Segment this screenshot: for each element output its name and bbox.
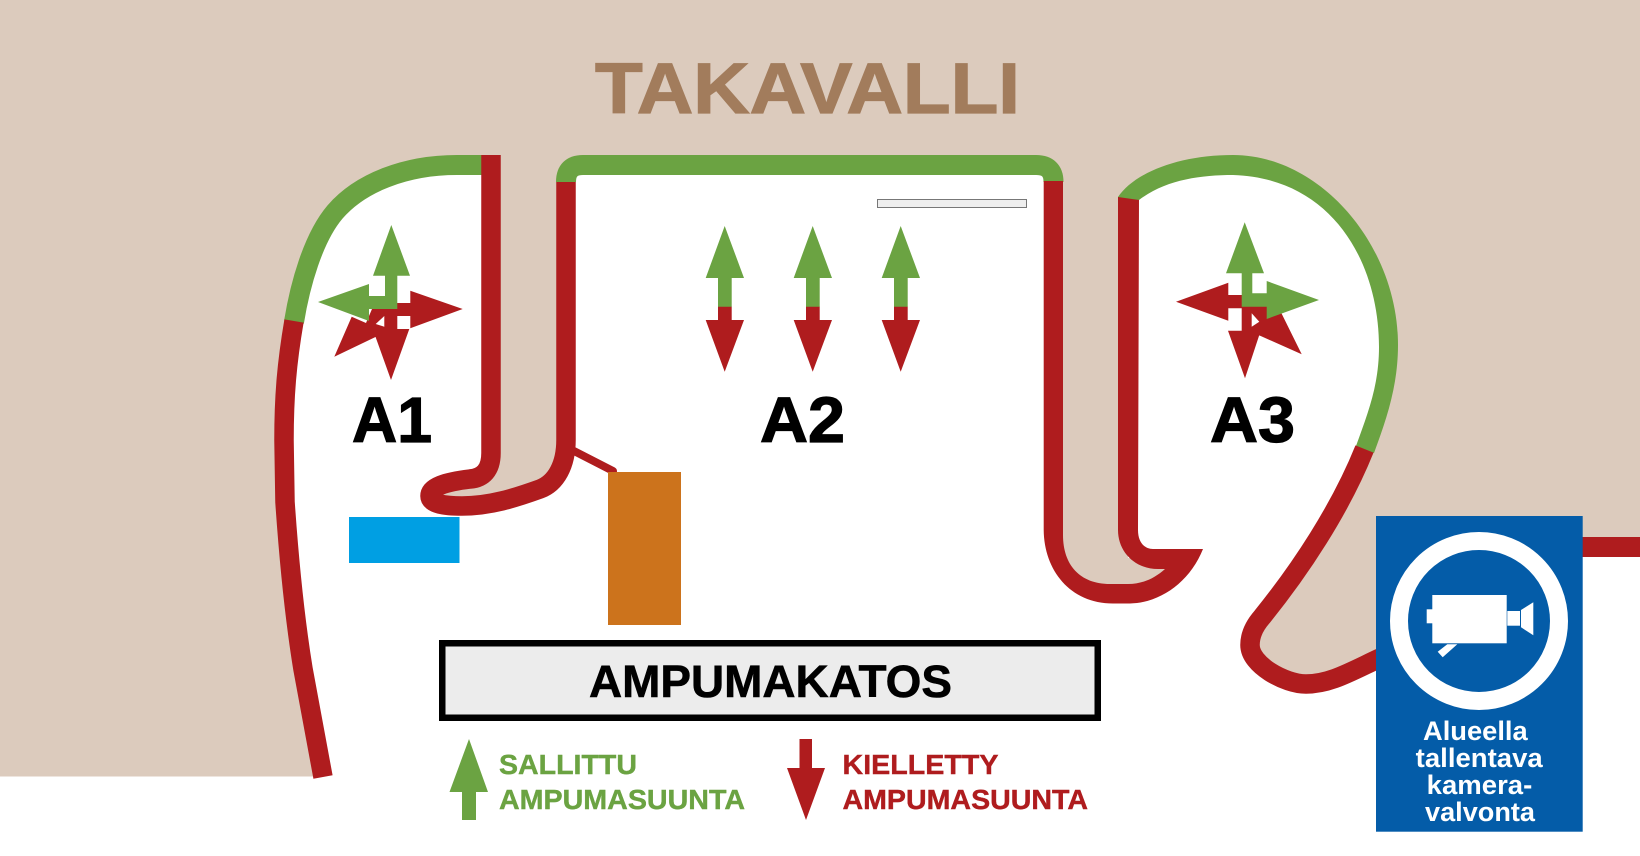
red stub line to orange block xyxy=(574,451,613,471)
legend: allowed direction xyxy=(450,739,745,820)
legend: forbidden direction: AMPUMASUUNTA xyxy=(842,784,1088,815)
red embankment right of sign xyxy=(1580,537,1640,557)
orange block xyxy=(608,472,681,625)
legend: allowed direction: AMPUMASUUNTA xyxy=(499,784,745,815)
sign: camera surveillance: tallentava xyxy=(1416,743,1544,773)
sign: camera surveillance: valvonta xyxy=(1425,797,1536,827)
arrows A3: shooting directions xyxy=(1176,222,1319,378)
berm A2: green top and red right side xyxy=(566,165,1203,604)
icon: video camera xyxy=(1427,595,1533,657)
label A2: A2 xyxy=(760,384,845,456)
legend: forbidden direction xyxy=(787,739,1088,820)
small target rail xyxy=(878,200,1026,208)
arrow A2 middle xyxy=(794,226,832,372)
sign: camera surveillance xyxy=(1376,516,1583,832)
arrow A2 right xyxy=(882,226,920,372)
label A1: A1 xyxy=(352,384,432,456)
berm A3: green and red embankment xyxy=(1118,155,1398,684)
blue block xyxy=(349,517,460,563)
arrows A1: shooting directions xyxy=(318,225,463,380)
label A3: A3 xyxy=(1210,384,1295,456)
arrow A2 left xyxy=(706,226,744,372)
legend: allowed direction: SALLITTU xyxy=(499,749,637,780)
title: TAKAVALLI: TAKAVALLI xyxy=(595,50,1020,129)
sign: camera surveillance: kamera- xyxy=(1427,770,1532,800)
legend: forbidden direction: KIELLETTY xyxy=(842,749,998,780)
shooting shelter box: AMPUMAKATOS xyxy=(442,643,1098,718)
sign: camera surveillance: Alueella xyxy=(1423,716,1529,746)
berm A1: green and red embankment xyxy=(284,155,566,777)
shooting shelter box: AMPUMAKATOS: AMPUMAKATOS xyxy=(589,656,952,707)
